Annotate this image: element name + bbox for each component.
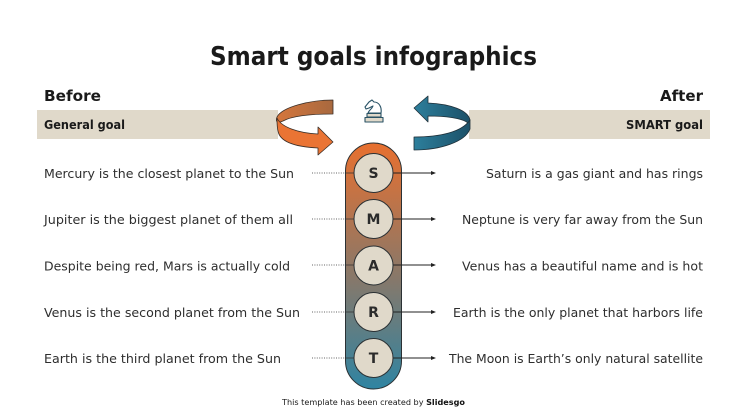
text block: before items: Mercury is the closest planet to the Sun bbox=[44, 167, 294, 181]
footer credit: This template has been created by Slidesgo bbox=[281, 398, 465, 407]
left connector stubs bbox=[346, 173, 354, 358]
step A: A bbox=[368, 258, 379, 274]
text block: after items: Venus has a beautiful name and is hot bbox=[462, 260, 703, 274]
text block: before items: Earth is the third planet from the Sun bbox=[44, 352, 281, 366]
arrow: left orange bbox=[276, 100, 333, 155]
step M bbox=[354, 200, 393, 238]
heading: before: Before bbox=[44, 87, 101, 105]
step A bbox=[354, 246, 393, 285]
text block: after items bbox=[448, 167, 703, 366]
step R: R bbox=[368, 305, 379, 321]
arrow connectors bbox=[393, 171, 436, 360]
band: smart goal bbox=[469, 110, 710, 139]
arrow: right teal bbox=[414, 96, 470, 150]
icon: chess knight bbox=[365, 100, 383, 122]
dotted connectors bbox=[312, 173, 346, 358]
band: smart goal: SMART goal bbox=[626, 118, 703, 132]
title: Smart goals infographics bbox=[210, 42, 537, 72]
step T bbox=[354, 338, 393, 378]
capsule bbox=[346, 143, 402, 389]
step S: S bbox=[368, 166, 379, 182]
text block: after items: Saturn is a gas giant and has rings bbox=[486, 167, 703, 181]
text block: before items: Venus is the second planet from the Sun bbox=[44, 306, 300, 320]
step S bbox=[354, 154, 393, 192]
band: general goal: General goal bbox=[44, 118, 125, 132]
step R bbox=[354, 292, 393, 332]
text block: before items: Despite being red, Mars is actually cold bbox=[44, 260, 290, 274]
band: general goal bbox=[37, 110, 278, 139]
text block: after items: The Moon is Earth’s only natural satellite bbox=[448, 352, 703, 366]
text block: after items: Neptune is very far away from the Sun bbox=[462, 213, 703, 227]
text block: before items bbox=[43, 167, 300, 366]
step M: M bbox=[367, 212, 380, 228]
text block: before items: Jupiter is the biggest planet of them all bbox=[43, 213, 293, 227]
text block: after items: Earth is the only planet that harbors life bbox=[453, 306, 703, 320]
heading: after: After bbox=[660, 87, 703, 105]
step T: T bbox=[369, 351, 379, 367]
